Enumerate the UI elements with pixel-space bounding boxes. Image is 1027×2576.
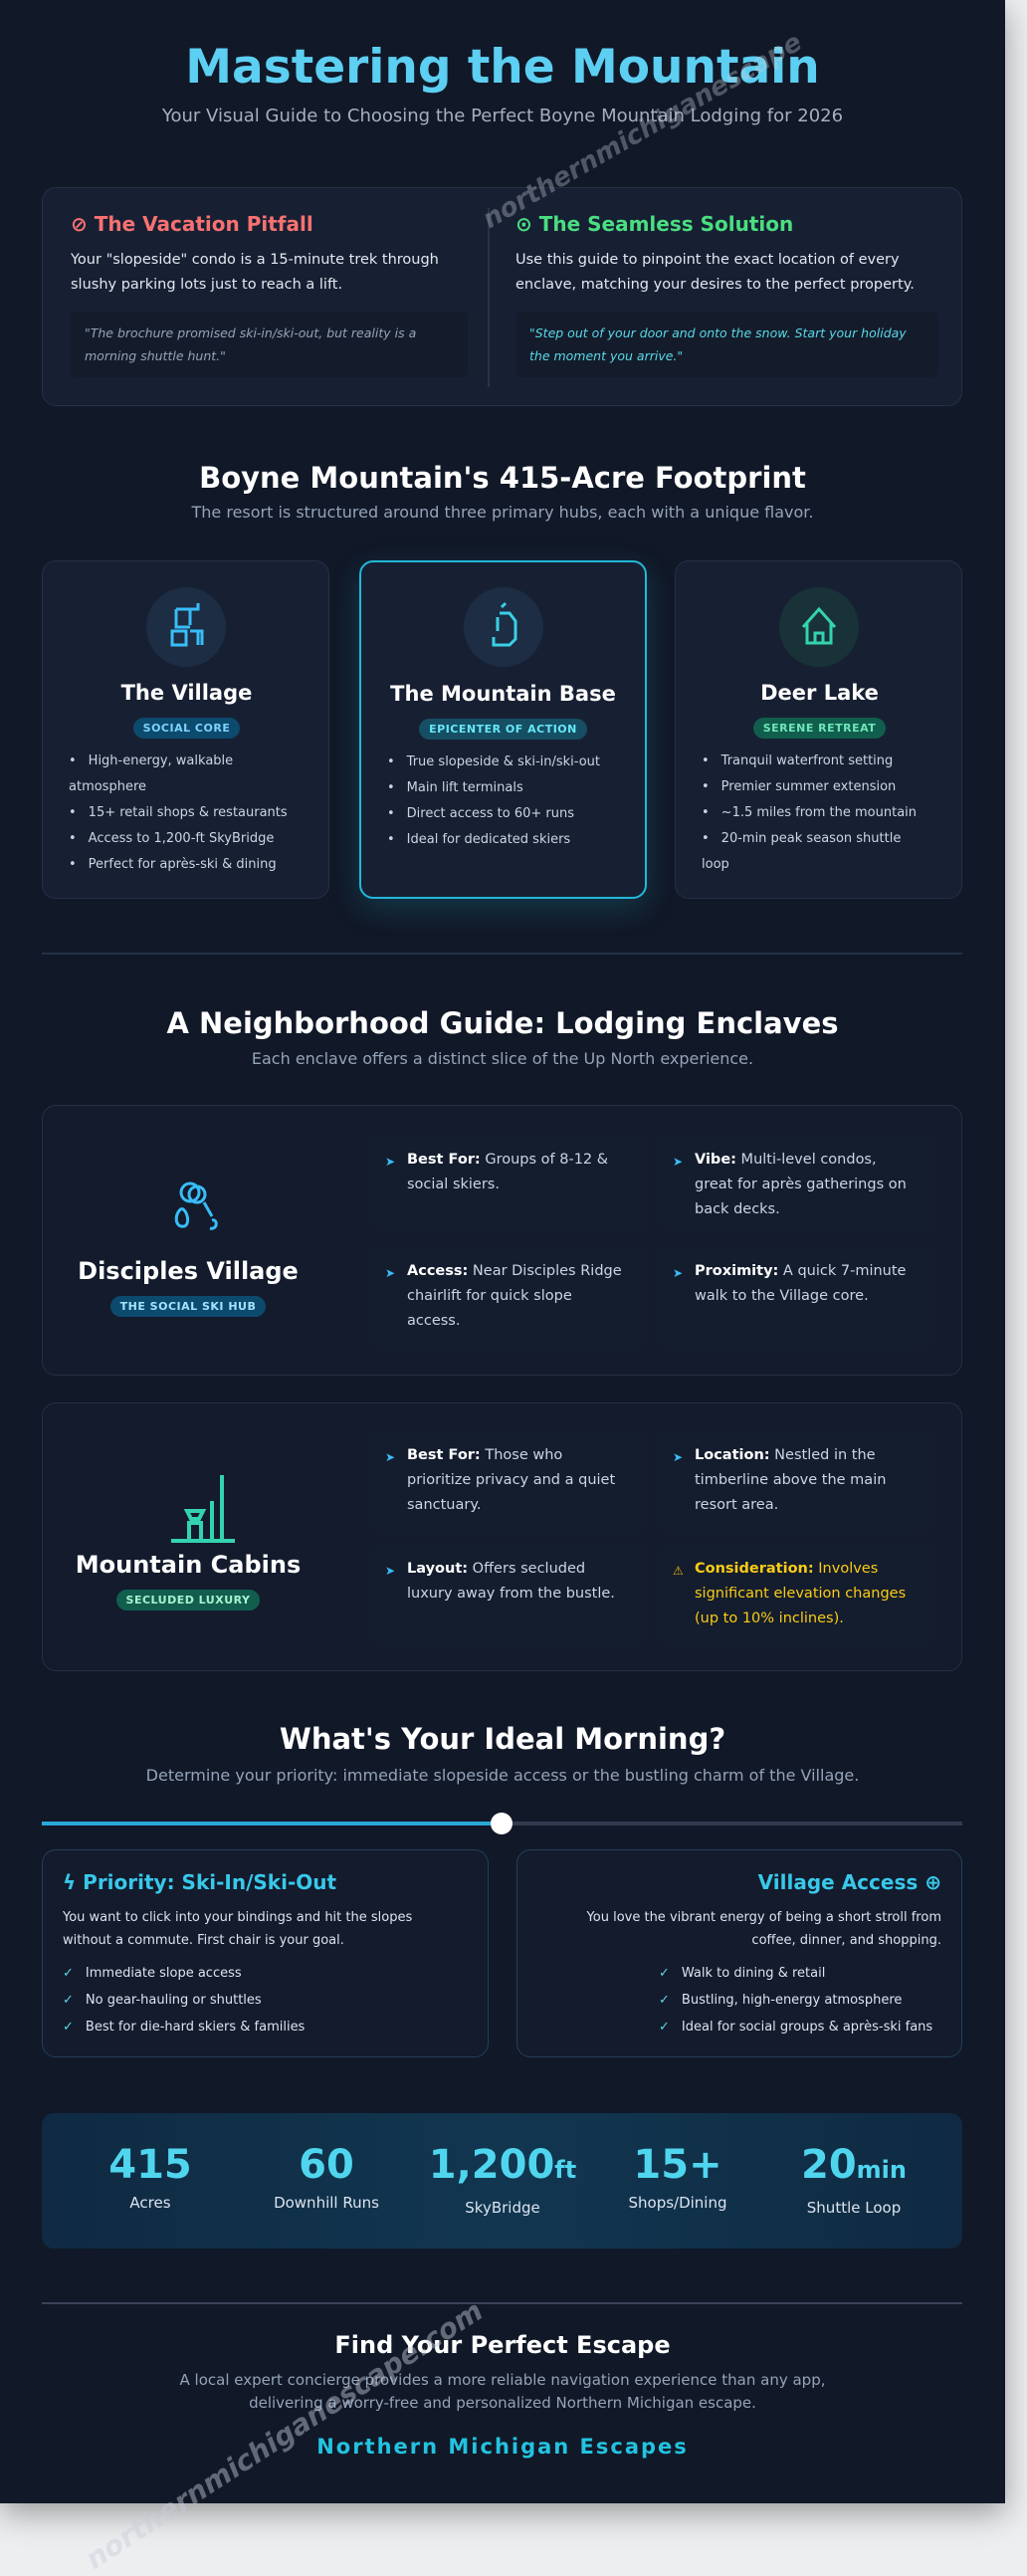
bullets: Ideal for dedicated skiers [407, 832, 570, 847]
cell: access [371, 1245, 648, 1349]
cell: best for [371, 1134, 648, 1231]
cell: consideration: ⚠ [673, 1564, 684, 1578]
bullets: 20-min peak season shuttle loop [702, 831, 901, 872]
panel: ski-in ski-out [42, 1849, 489, 2057]
panel: pitfall vs solution [42, 187, 962, 406]
solution quote [515, 312, 938, 377]
pitfall quote: "The brochure promised ski-in/ski-out, but reality is a morning shuttle hunt." [85, 325, 416, 363]
icon: house [779, 587, 859, 667]
footer text: delivering a worry-free and personalized Northern Michigan escape. [249, 2394, 756, 2412]
solution text: Use this guide to pinpoint the exact location of every enclave, matching your desires to the perfect property. [515, 252, 915, 293]
checklist [63, 1966, 305, 2035]
bullets: True slopeside & ski-in/ski-out [407, 754, 600, 769]
panel: village access [516, 1849, 962, 2057]
cell: proximity [659, 1245, 935, 1349]
text: You want to click into your bindings and hit the slopes without a commute. First chair is your goal. [63, 1910, 412, 1948]
pitfall heading: ⊘ The Vacation Pitfall [71, 212, 313, 236]
bullets: 15+ retail shops & restaurants [89, 805, 288, 820]
cell: vibe [659, 1134, 935, 1231]
checklist: ✓ Best for die-hard skiers & families [63, 2020, 305, 2035]
badge: social core: SOCIAL CORE [143, 722, 230, 735]
checklist: ✓ Ideal for social groups & après-ski fans [659, 2020, 932, 2035]
stat: shops [628, 2142, 727, 2212]
heading: ϟ Priority: Ski-In/Ski-Out [63, 1870, 336, 1894]
cell: layout: Layout: Offers secluded luxury away from the bustle. [407, 1561, 615, 1602]
panel: deer lake [675, 560, 962, 899]
subheading: Each enclave offers a distinct slice of the Up North experience. [252, 1049, 753, 1068]
watermark: northernmichiganescape.com [80, 2294, 489, 2576]
text: You love the vibrant energy of being a short stroll from coffee, dinner, and shopping. [587, 1910, 941, 1948]
checklist: ✓ No gear-hauling or shuttles [63, 1993, 262, 2008]
footer heading: Find Your Perfect Escape [334, 2331, 671, 2359]
title: mountain base: The Mountain Base [390, 682, 616, 706]
cell: proximity: ➤ [673, 1266, 683, 1280]
cell: layout [371, 1543, 648, 1646]
badge: THE SOCIAL SKI HUB [120, 1300, 256, 1313]
bullets: Access to 1,200-ft SkyBridge [89, 831, 274, 846]
checklist: ✓ Bustling, high-energy atmosphere [659, 1993, 902, 2008]
stat: shuttle: Shuttle Loop [807, 2199, 901, 2217]
title: Mastering the Mountain [185, 40, 820, 95]
pitfall column [71, 212, 439, 363]
badge: epicenter: EPICENTER OF ACTION [429, 723, 577, 736]
pitfall quote [71, 312, 469, 377]
cell: best for: Best For: Groups of 8-12 & social skiers. [407, 1152, 608, 1192]
cell: best for: Best For: Those who prioritize privacy and a quiet sanctuary. [407, 1447, 615, 1513]
stat: skybridge: 1,200ft [429, 2142, 576, 2188]
cell: consideration: Consideration: Involves significant elevation changes (up to 10% inclines). [695, 1561, 906, 1626]
checklist [659, 1966, 932, 2035]
name: Disciples Village [78, 1257, 299, 1285]
cell: vibe: Vibe: Multi-level condos, great for après gatherings on back decks. [695, 1152, 907, 1217]
solution quote: "Step out of your door and onto the snow. Start your holiday the moment you arrive." [529, 325, 907, 363]
watermark: northernmichiganescape [478, 28, 807, 235]
icon: village [146, 587, 226, 667]
cell: best for [371, 1429, 648, 1533]
cell: best for: ➤ [385, 1450, 395, 1464]
stat: shuttle: 20min [801, 2142, 907, 2188]
heading: ideal morning: What's Your Ideal Morning? [280, 1722, 725, 1756]
bullets: Main lift terminals [407, 780, 523, 795]
solution heading: ⊙ The Seamless Solution [515, 212, 793, 236]
name: Mountain Cabins [76, 1551, 301, 1579]
stat: runs: 60 [299, 2142, 354, 2188]
heading: neighborhood guide: A Neighborhood Guide: Lodging Enclaves [166, 1006, 838, 1040]
stat: acres: Acres [129, 2194, 171, 2212]
pitfall text: Your "slopeside" condo is a 15-minute trek through slushy parking lots just to reach a lift. [71, 252, 439, 293]
solution column [515, 212, 915, 363]
panel: the village [42, 560, 329, 899]
panel: disciples village [42, 1105, 962, 1376]
cell: location: ➤ [673, 1450, 683, 1464]
stat: skybridge: SkyBridge [465, 2199, 540, 2217]
title: the village: The Village [121, 681, 252, 705]
stat: shops: Shops/Dining [628, 2194, 727, 2212]
heading: footprint: Boyne Mountain's 415-Acre Footprint [199, 461, 806, 495]
cell: location [659, 1429, 935, 1533]
subheading: The resort is structured around three primary hubs, each with a unique flavor. [191, 503, 813, 522]
heading: Village Access ⊕ [758, 1870, 941, 1894]
bullets: Premier summer extension [721, 779, 896, 794]
title: deer lake: Deer Lake [760, 681, 879, 705]
bullets [69, 753, 288, 872]
cell: access: ➤ [385, 1266, 395, 1280]
footer text [179, 2371, 826, 2412]
panel: mountain cabins [42, 1402, 962, 1671]
stat: skybridge [429, 2142, 576, 2217]
subtitle: Your Visual Guide to Choosing the Perfect Boyne Mountain Lodging for 2026 [162, 106, 843, 126]
cell: vibe: ➤ [673, 1155, 683, 1169]
bullets: Tranquil waterfront setting [721, 753, 893, 768]
brand: Northern Michigan Escapes [316, 2435, 689, 2459]
subheading: Determine your priority: immediate slopeside access or the bustling charm of the Village. [146, 1766, 859, 1785]
stat: acres: 415 [108, 2142, 192, 2188]
bullets: High-energy, walkable atmosphere [69, 753, 233, 794]
bullets [389, 754, 600, 847]
panel: mountain base [359, 560, 647, 899]
checklist: ✓ Immediate slope access [63, 1966, 242, 1981]
icon: group [175, 1182, 218, 1230]
stats panel [42, 2113, 962, 2249]
icon: mountain base [464, 587, 543, 667]
slider [42, 1813, 962, 1834]
badge: serene retreat: SERENE RETREAT [763, 722, 876, 735]
stat: runs [274, 2142, 379, 2212]
stat: shuttle [801, 2142, 907, 2217]
stat: shops: 15+ [633, 2142, 722, 2188]
stat: runs: Downhill Runs [274, 2194, 379, 2212]
bullets: ~1.5 miles from the mountain [721, 805, 917, 820]
cell: proximity: Proximity: A quick 7-minute walk to the Village core. [695, 1263, 906, 1304]
checklist: ✓ Walk to dining & retail [659, 1966, 825, 1981]
cell: access: Access: Near Disciples Ridge chairlift for quick slope access. [407, 1263, 622, 1329]
badge: SECLUDED LUXURY [126, 1594, 250, 1607]
stat: acres [108, 2142, 192, 2212]
cell: consideration [659, 1543, 935, 1646]
bullets [702, 753, 917, 872]
cell: location: Location: Nestled in the timberline above the main resort area. [695, 1447, 886, 1513]
footer text: A local expert concierge provides a more reliable navigation experience than any app, [179, 2371, 826, 2389]
icon: cabins [171, 1475, 235, 1543]
cell: layout: ➤ [385, 1564, 395, 1578]
bullets: Direct access to 60+ runs [407, 806, 574, 821]
bullets: Perfect for après-ski & dining [89, 857, 277, 872]
cell: best for: ➤ [385, 1155, 395, 1169]
